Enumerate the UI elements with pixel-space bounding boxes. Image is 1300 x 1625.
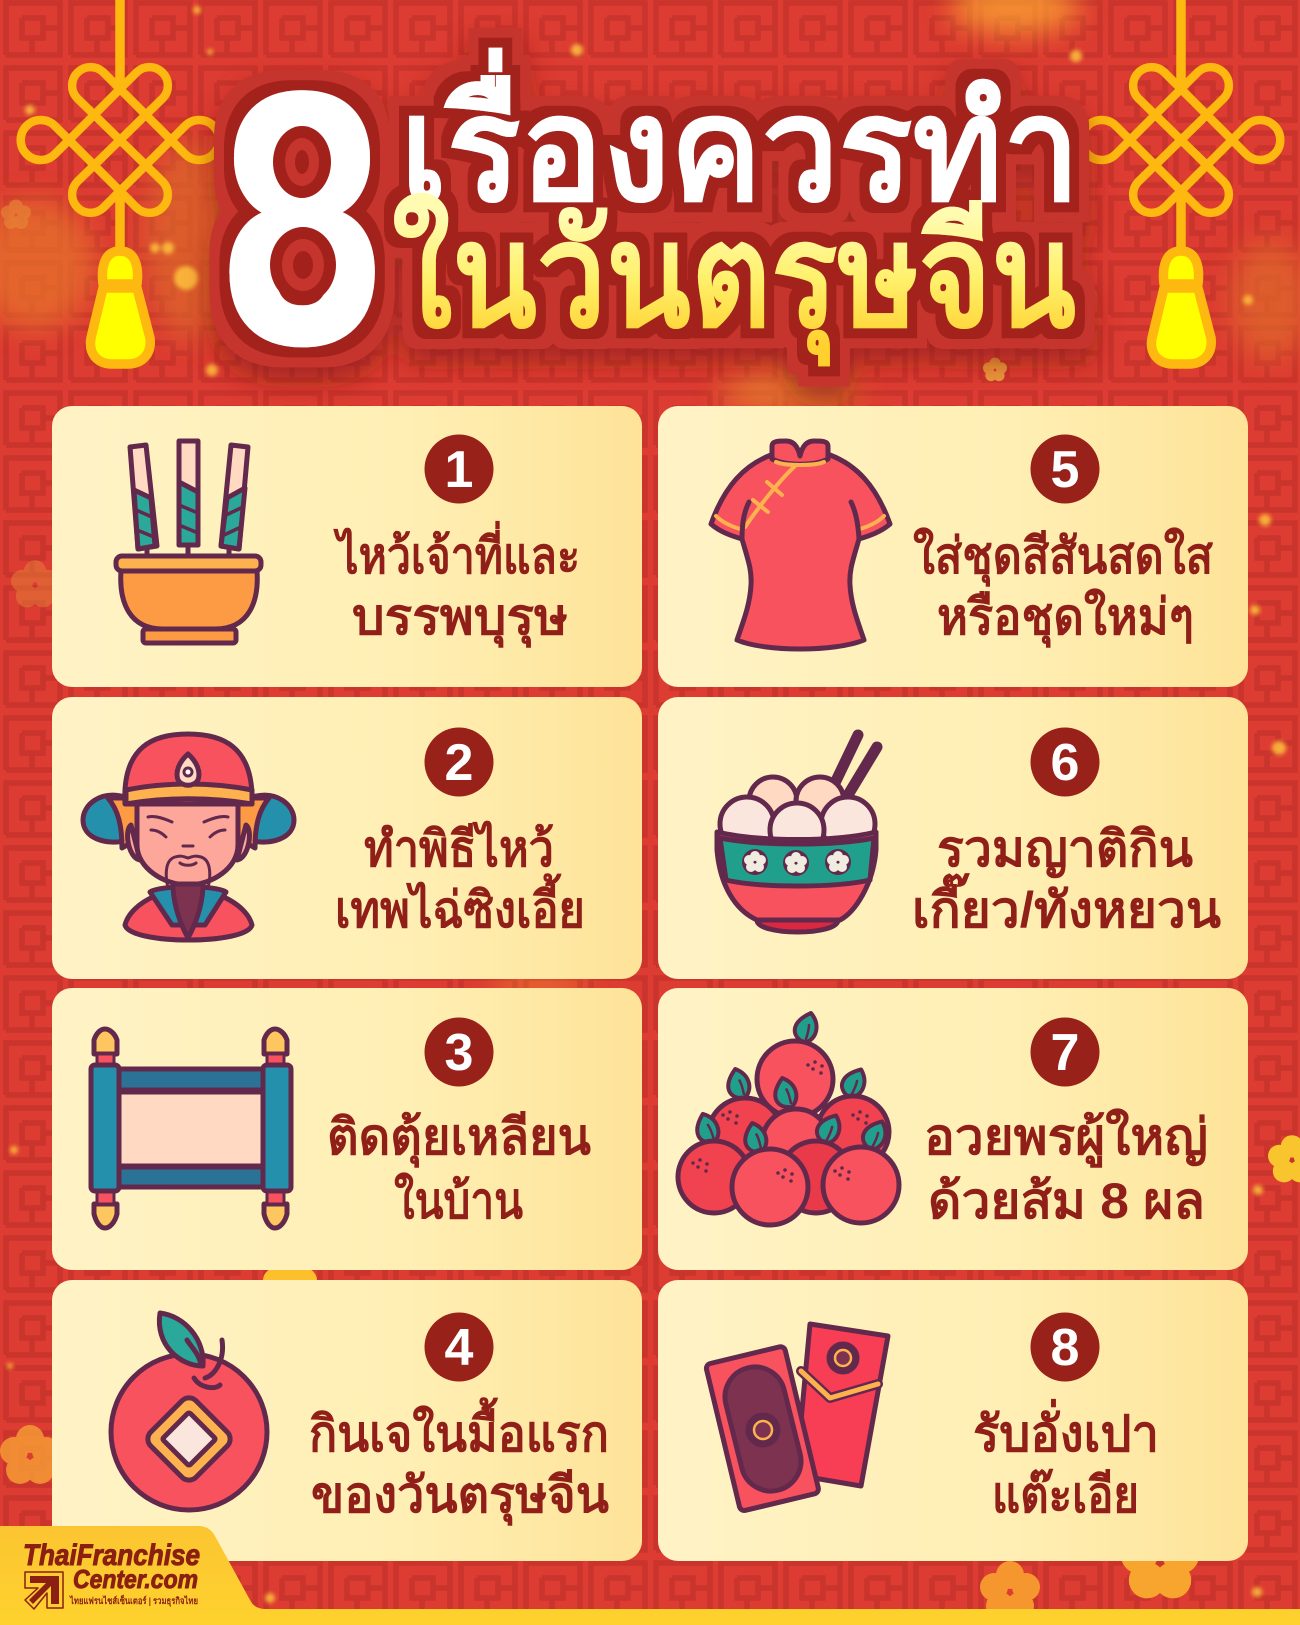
logo: ThaiFranchise Center: Center.com xyxy=(73,1564,198,1594)
label 5: ใส่ชุดสีสันสดใส xyxy=(913,527,1213,587)
number badge 8: 8 xyxy=(1051,1319,1079,1377)
icon: bowl of rice balls xyxy=(717,735,877,932)
title: เรื่องควรทำ xyxy=(400,47,1080,231)
panel: item 4 xyxy=(52,1280,642,1561)
panel: item 1 xyxy=(52,406,642,687)
label 8: แต๊ะเอีย xyxy=(992,1467,1139,1523)
label 1: บรรพบุรุษ xyxy=(352,589,568,648)
number badge 4 xyxy=(424,1312,494,1382)
label 6: เกี๊ยว/ทังหยวน xyxy=(912,873,1221,938)
label 2: เทพไฉ่ซิงเอี้ย xyxy=(335,873,585,938)
logo: ThaiFranchise Center xyxy=(23,1539,200,1609)
icon: logo arrow xyxy=(25,1572,63,1609)
icon: red qipao xyxy=(711,441,890,649)
number badge 6 xyxy=(1030,728,1100,796)
right Chinese knot ornament xyxy=(1082,0,1280,364)
panel: item 8 xyxy=(658,1280,1248,1561)
label 6: รวมญาติกิน xyxy=(937,821,1193,878)
number badge 6: 6 xyxy=(1051,734,1079,792)
number badge 5: 5 xyxy=(1051,441,1079,499)
logo: ThaiFranchise Center: ไทยแฟรนไชส์เซ็นเตอร์ | รวมธุรกิจไทย xyxy=(69,1594,198,1607)
panel: item 7 xyxy=(658,988,1248,1270)
label 1: ไหว้เจ้าที่และ xyxy=(333,521,580,584)
icon: orange with coin xyxy=(111,1313,267,1510)
label 3: ในบ้าน xyxy=(394,1172,523,1229)
number badge 3 xyxy=(424,1018,494,1086)
number badge 2: 2 xyxy=(445,734,473,792)
label 5: หรือชุดใหม่ๆ xyxy=(937,588,1194,648)
number badge 7: 7 xyxy=(1051,1024,1079,1082)
number badge 2 xyxy=(424,728,494,796)
title: 8 xyxy=(224,21,380,415)
panel: item 2 xyxy=(52,697,642,979)
label 7: ด้วยส้ม 8 ผล xyxy=(928,1173,1205,1229)
label 7 xyxy=(924,1108,1208,1229)
icon: pile of oranges xyxy=(678,1013,899,1225)
number badge 1: 1 xyxy=(445,441,473,499)
label 8: รับอั่งเปา xyxy=(973,1399,1159,1462)
number badge 7 xyxy=(1030,1018,1100,1086)
label 2: ทำพิธีไหว้ xyxy=(364,820,554,877)
number badge 8 xyxy=(1030,1312,1100,1382)
number badge 4: 4 xyxy=(445,1319,474,1377)
label 4 xyxy=(309,1397,609,1526)
label 2 xyxy=(335,820,585,938)
title xyxy=(224,21,1080,415)
label 3 xyxy=(327,1109,591,1229)
logo: ThaiFranchise Center: ThaiFranchise xyxy=(23,1539,200,1572)
label 4: กินเจในมื้อแรก xyxy=(309,1397,609,1462)
label 4: ของวันตรุษจีน xyxy=(311,1467,609,1526)
panel: item 3 xyxy=(52,988,642,1270)
label 3: ติดตุ้ยเหลียน xyxy=(327,1109,591,1168)
panel: item 6 xyxy=(658,697,1248,979)
number badge 3: 3 xyxy=(445,1024,473,1082)
icon: god of wealth xyxy=(83,734,294,940)
label 8 xyxy=(973,1399,1159,1523)
icon: red envelopes xyxy=(705,1324,888,1511)
label 1 xyxy=(333,521,580,648)
label 6 xyxy=(912,821,1221,938)
label 5 xyxy=(913,527,1213,648)
number badge 5 xyxy=(1030,434,1100,504)
panel: item 5 xyxy=(658,406,1248,687)
left Chinese knot ornament xyxy=(21,0,219,364)
icon: incense pot xyxy=(116,441,261,643)
icon: scroll xyxy=(91,1029,291,1228)
title: ในวันตรุษจีน xyxy=(392,192,1076,367)
number badge 1 xyxy=(424,434,494,504)
label 7: อวยพรผู้ใหญ่ xyxy=(924,1108,1208,1168)
footer: yellow strip and logo xyxy=(0,1526,1300,1625)
